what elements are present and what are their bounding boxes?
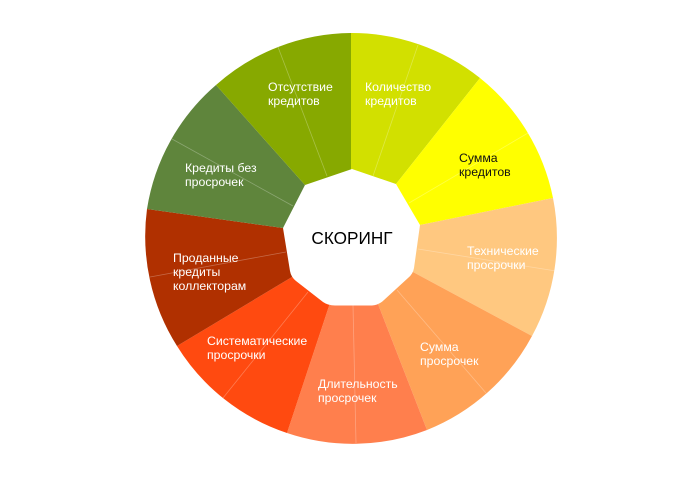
- segment: сумма просрочек: Сумма: [420, 340, 459, 354]
- segment: длительность просрочек: [287, 238, 427, 444]
- segment: длительность просрочек: просрочек: [318, 391, 377, 405]
- segment: количество кредитов: Количество: [365, 80, 431, 94]
- segment: сумма просрочек: [351, 238, 532, 430]
- segment: длительность просрочек: Длительность: [318, 377, 398, 391]
- segment: отсутствие кредитов: Отсутствие: [268, 80, 333, 94]
- segment: количество кредитов: [351, 33, 480, 238]
- segment: сумма кредитов: кредитов: [459, 165, 511, 179]
- segment: проданные кредиты коллекторам: кредиты: [173, 265, 220, 279]
- center label: СКОРИНГ: [311, 228, 393, 248]
- segment: отсутствие кредитов: кредитов: [268, 94, 320, 108]
- segment: технические просрочки: [351, 198, 557, 336]
- segment: проданные кредиты коллекторам: [145, 209, 351, 346]
- segment: систематические просрочки: [177, 238, 351, 433]
- center polygon: [283, 169, 420, 306]
- segment: проданные кредиты коллекторам: Проданные: [173, 251, 239, 265]
- segment: технические просрочки: Технические: [467, 244, 539, 258]
- segment: кредиты без просрочек: [147, 85, 351, 238]
- segment: кредиты без просрочек: Кредиты без: [185, 161, 257, 175]
- segment: сумма просрочек: просрочек: [420, 354, 479, 368]
- segment: сумма кредитов: [351, 78, 553, 238]
- segment: отсутствие кредитов: [216, 33, 351, 238]
- segment: технические просрочки: просрочки: [467, 258, 526, 272]
- segment: сумма кредитов: Сумма: [459, 151, 498, 165]
- segment: кредиты без просрочек: просрочек: [185, 175, 244, 189]
- segment: количество кредитов: кредитов: [365, 94, 417, 108]
- segment: систематические просрочки: просрочки: [207, 348, 266, 362]
- segment: проданные кредиты коллекторам: коллекторам: [173, 279, 246, 293]
- segment: систематические просрочки: Систематические: [207, 334, 307, 348]
